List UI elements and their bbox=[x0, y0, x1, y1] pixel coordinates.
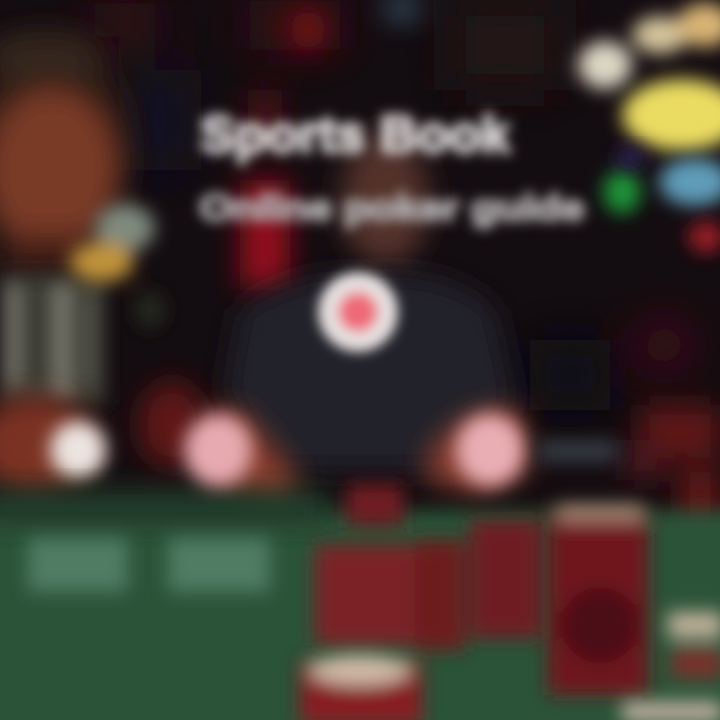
yellow bowl bbox=[622, 79, 720, 151]
blue badge bbox=[659, 158, 720, 206]
striped shirt bbox=[0, 275, 105, 405]
right arm bbox=[425, 408, 530, 495]
top right logo bbox=[578, 3, 720, 253]
center chip icon bbox=[318, 272, 398, 352]
green badge bbox=[603, 170, 641, 214]
chip stacks bbox=[300, 484, 720, 720]
small logo near left man bbox=[70, 204, 166, 330]
table label left bbox=[28, 538, 128, 592]
red accent bbox=[688, 221, 720, 253]
red vertical banner bbox=[240, 0, 420, 290]
dark shirt bbox=[225, 273, 515, 470]
right pink chip bbox=[456, 414, 524, 486]
arm and hand bbox=[0, 395, 95, 495]
hair and face bbox=[0, 31, 130, 275]
background lights bbox=[95, 0, 690, 410]
subtitle: Online poker guide bbox=[200, 187, 584, 228]
red side glow bbox=[138, 381, 206, 469]
far right chips bbox=[622, 612, 720, 720]
head bbox=[341, 132, 429, 268]
small right label bbox=[538, 440, 618, 462]
left man bbox=[0, 31, 130, 495]
right red chips background bbox=[625, 405, 720, 555]
table label right bbox=[168, 538, 270, 592]
tall right stack bbox=[548, 504, 648, 695]
bottom front chip bbox=[300, 655, 422, 720]
white petals bbox=[578, 3, 720, 89]
center stacks bbox=[315, 484, 542, 650]
left arm bbox=[200, 409, 300, 510]
center man bbox=[200, 132, 530, 510]
left pink chip bbox=[184, 414, 252, 486]
white chip bbox=[50, 421, 106, 479]
title: Sports Book bbox=[200, 106, 510, 164]
purple accent bbox=[614, 148, 646, 168]
table bbox=[0, 490, 720, 720]
